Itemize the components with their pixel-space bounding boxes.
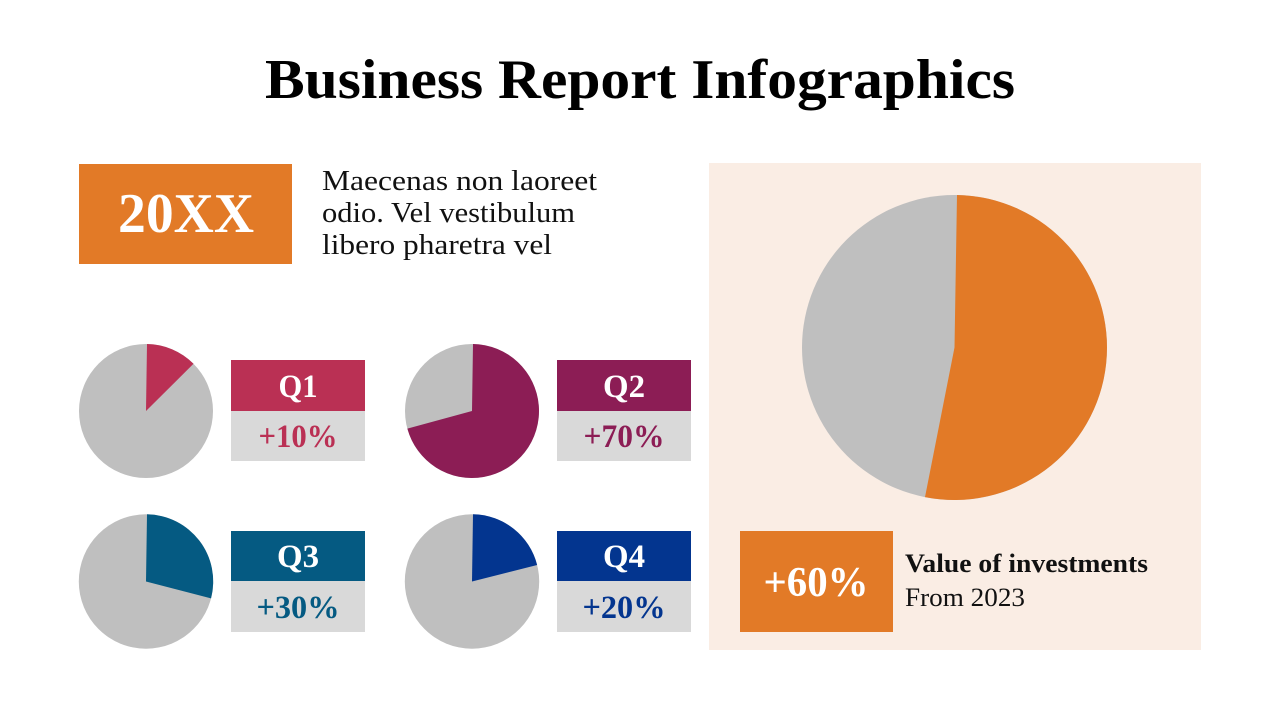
Q2 label: +70% — [584, 419, 664, 455]
Q1 label: Q1 — [278, 369, 318, 405]
Q2 label: Q2 — [603, 369, 645, 405]
Q1 label — [231, 360, 365, 461]
Q3 label: Q3 — [277, 539, 319, 575]
badge: +60% — [740, 531, 893, 632]
Q3 label — [231, 531, 365, 632]
Q4 label — [557, 531, 691, 632]
intro text block — [322, 165, 597, 261]
panel: investments — [709, 163, 1201, 650]
badge: 20XX — [79, 164, 292, 264]
badge: 20XX: 20XX — [118, 183, 254, 245]
investment caption — [905, 549, 1148, 612]
investment caption: Value of investments — [905, 549, 1148, 578]
Q2 pie chart — [405, 344, 539, 478]
big pie chart — [802, 195, 1107, 500]
investment caption: From 2023 — [905, 583, 1025, 612]
Q4 pie chart — [405, 514, 539, 649]
Q1 pie chart — [79, 344, 213, 478]
Q1 label: +10% — [258, 419, 338, 455]
intro text block: odio. Vel vestibulum — [322, 197, 575, 229]
title: Business Report Infographics — [265, 49, 1015, 111]
Q4 label: Q4 — [603, 539, 645, 575]
Q4 label: +20% — [582, 590, 666, 626]
Q2 label — [557, 360, 691, 461]
intro text block: Maecenas non laoreet — [322, 165, 597, 197]
intro text block: libero pharetra vel — [322, 229, 552, 261]
Q3 pie chart — [79, 514, 213, 649]
badge: +60%: +60% — [764, 560, 868, 606]
Q3 label: +30% — [256, 590, 340, 626]
